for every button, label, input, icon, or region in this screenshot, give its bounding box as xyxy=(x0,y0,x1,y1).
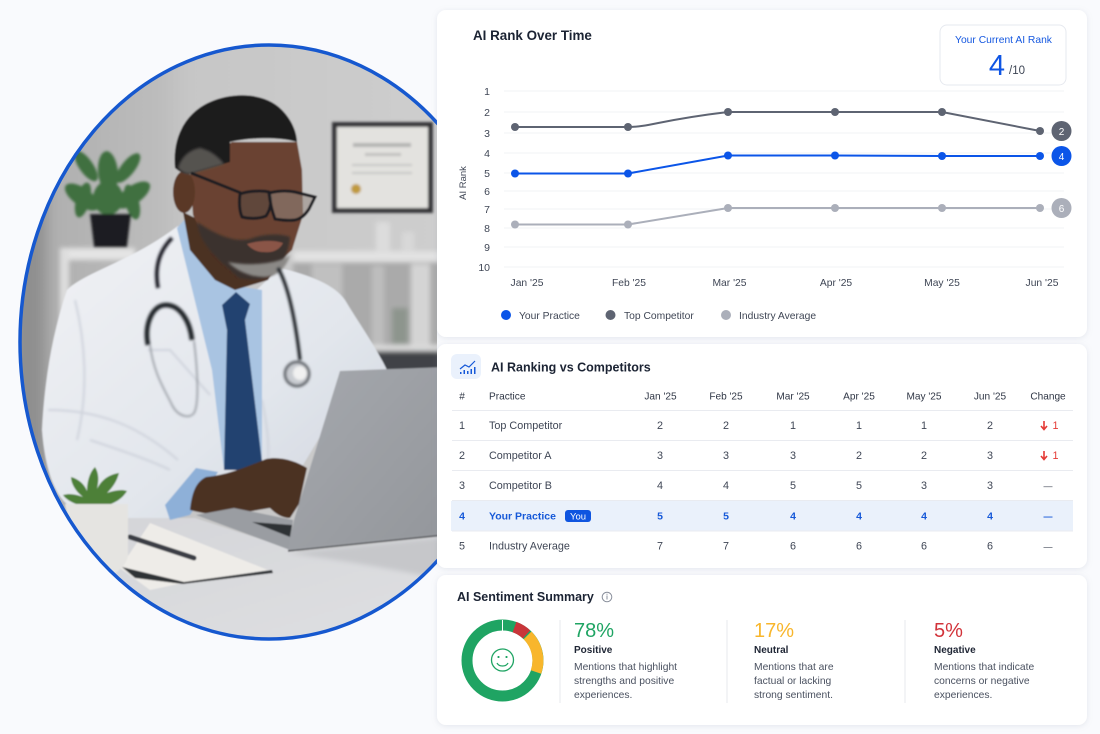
panel: AI Rank Over Time xyxy=(437,10,1087,337)
stat: neutral: factual or lacking xyxy=(754,676,832,687)
glasses xyxy=(191,173,315,220)
current rank card xyxy=(940,25,1066,85)
row: Top Competitor xyxy=(459,420,1059,432)
row: Competitor A: 2 xyxy=(856,450,862,462)
hand on keyboard xyxy=(190,458,307,518)
face xyxy=(189,140,304,257)
y axis labels: 4 xyxy=(484,148,490,160)
oval blue frame xyxy=(18,43,437,641)
row: Top Competitor: 2 xyxy=(987,420,993,432)
row: Competitor A: 2 xyxy=(921,450,927,462)
row: Top Competitor: 1 xyxy=(459,420,465,432)
row: Competitor B: Competitor B xyxy=(489,480,552,492)
beard xyxy=(197,222,290,279)
y axis labels: 5 xyxy=(484,168,490,180)
lab coat xyxy=(42,226,388,522)
change: down 1 xyxy=(1041,420,1059,432)
shirt cuff xyxy=(165,468,218,520)
line: industry average xyxy=(511,204,1044,228)
y axis labels: 7 xyxy=(484,204,490,216)
row: Competitor B: 5 xyxy=(790,480,796,492)
stat: positive: experiences. xyxy=(574,690,632,701)
icon: smile xyxy=(492,649,514,671)
table header: Change xyxy=(1030,392,1066,402)
end badges xyxy=(1052,121,1072,218)
donut chart xyxy=(467,620,538,696)
y axis title: AI Rank xyxy=(458,166,469,200)
row: Industry Average: 6 xyxy=(987,540,993,552)
row: Industry Average: 6 xyxy=(921,540,927,552)
row: Your Practice: 5 xyxy=(723,510,729,522)
y axis labels: 8 xyxy=(484,223,490,235)
x axis labels: Jan '25 xyxy=(511,278,544,289)
coat shading folds xyxy=(48,300,268,470)
table header: May '25 xyxy=(906,392,942,402)
end badges: 2 xyxy=(1059,127,1065,138)
row: Competitor B: 3 xyxy=(459,480,465,492)
x axis labels: Feb '25 xyxy=(612,278,646,289)
row: Your Practice: 4 xyxy=(987,510,993,522)
y axis labels: 3 xyxy=(484,128,490,140)
right shelf with binders xyxy=(293,222,443,373)
shirt collar xyxy=(177,218,262,470)
row: Competitor B: — xyxy=(1044,481,1052,491)
legend: Your Practice xyxy=(519,311,580,322)
y axis labels: 2 xyxy=(484,107,490,119)
line: your practice xyxy=(511,152,1044,178)
row: Your Practice: Your Practice xyxy=(489,510,556,522)
row: Your Practice xyxy=(459,510,1052,522)
end badges: 4 xyxy=(1059,152,1065,163)
small desk plant xyxy=(63,467,127,507)
potted plant on shelf xyxy=(60,147,155,247)
change: down 1: 1 xyxy=(1052,450,1059,462)
row: Competitor A: 3 xyxy=(790,450,796,462)
left white shelf xyxy=(58,246,136,316)
chart heading: AI Rank Over Time xyxy=(473,28,592,43)
necktie xyxy=(222,292,263,470)
neck xyxy=(183,212,280,290)
panel: AI Sentiment Summary xyxy=(437,575,1087,725)
stat: neutral: Neutral xyxy=(754,645,789,656)
legend: Industry Average xyxy=(739,311,816,322)
row: Competitor A: 3 xyxy=(657,450,663,462)
laptop screen back xyxy=(288,367,445,551)
row: Your Practice: You xyxy=(570,512,586,522)
stat: neutral: 17% xyxy=(754,620,794,642)
row: Industry Average: 7 xyxy=(657,540,663,552)
stat: positive: 78% xyxy=(574,620,614,642)
icon: info xyxy=(602,592,612,602)
stethoscope xyxy=(147,238,309,416)
row: Your Practice: 4 xyxy=(790,510,796,522)
stat: negative xyxy=(934,620,1034,701)
current rank card: Your Current AI Rank xyxy=(955,35,1053,46)
end badges: 6 xyxy=(1059,204,1065,215)
row: Competitor B: 4 xyxy=(657,480,663,492)
row: Your Practice: 4 xyxy=(459,510,465,522)
stat: negative: experiences. xyxy=(934,690,992,701)
stat: positive xyxy=(574,620,677,701)
row: Industry Average: 6 xyxy=(856,540,862,552)
change: down 1: 1 xyxy=(1052,420,1059,432)
row: Your Practice: 4 xyxy=(921,510,927,522)
row: Competitor B xyxy=(459,480,1052,492)
row: Competitor A: 2 xyxy=(459,450,465,462)
x axis labels xyxy=(511,278,1059,289)
row: Competitor A: Competitor A xyxy=(489,450,552,462)
x axis labels: Jun '25 xyxy=(1026,278,1059,289)
legend xyxy=(501,310,816,322)
row: Your Practice: 5 xyxy=(657,510,663,522)
row: Top Competitor: 2 xyxy=(723,420,729,432)
table header xyxy=(459,392,1066,402)
photo: doctor using a laptop in an oval frame xyxy=(18,43,437,641)
row: Industry Average: 5 xyxy=(459,540,465,552)
row: Your Practice: 4 xyxy=(856,510,862,522)
y axis labels: 1 xyxy=(484,86,490,98)
row: Industry Average: 6 xyxy=(790,540,796,552)
row: Top Competitor: 1 xyxy=(856,420,862,432)
table heading: AI Ranking vs Competitors xyxy=(491,360,651,374)
table header: Jun '25 xyxy=(974,392,1007,402)
laptop shadow on desk xyxy=(295,535,437,576)
highlighted row xyxy=(451,501,1073,531)
stat: positive: Mentions that highlight xyxy=(574,662,677,673)
notebook xyxy=(120,523,268,590)
y axis labels xyxy=(478,86,490,274)
row: Industry Average: 7 xyxy=(723,540,729,552)
table header: Practice xyxy=(489,392,526,402)
row: Industry Average: — xyxy=(1044,542,1052,552)
row: Competitor B: 4 xyxy=(723,480,729,492)
row: Competitor A: 3 xyxy=(987,450,993,462)
row: Competitor B: 3 xyxy=(987,480,993,492)
mouth xyxy=(247,241,283,252)
stat: neutral xyxy=(754,620,834,701)
row: Industry Average: Industry Average xyxy=(489,540,570,552)
x axis labels: Apr '25 xyxy=(820,278,852,289)
stat: negative: concerns or negative xyxy=(934,676,1030,687)
row: Top Competitor: 1 xyxy=(921,420,927,432)
row: Your Practice: — xyxy=(1044,512,1052,522)
left blurred cabinet xyxy=(22,205,51,478)
stat: positive: Positive xyxy=(574,645,613,656)
table header: Feb '25 xyxy=(709,392,743,402)
table header: Apr '25 xyxy=(843,392,875,402)
sentiment heading: AI Sentiment Summary xyxy=(457,590,594,604)
icon: trend chart xyxy=(451,354,481,379)
office background wall xyxy=(38,46,437,552)
desk surface xyxy=(115,518,420,638)
current rank card: 4 xyxy=(989,50,1005,82)
table header: # xyxy=(459,392,465,402)
row: Competitor A: 3 xyxy=(723,450,729,462)
table header: Jan '25 xyxy=(644,392,677,402)
row: Industry Average xyxy=(459,540,1052,552)
y axis labels: 6 xyxy=(484,186,490,198)
x axis labels: Mar '25 xyxy=(712,278,747,289)
row: Competitor B: 5 xyxy=(856,480,862,492)
ear xyxy=(173,171,195,213)
stat: negative: 5% xyxy=(934,620,963,642)
y axis labels: 10 xyxy=(478,262,490,274)
row: Top Competitor: Top Competitor xyxy=(489,420,563,432)
stat: negative: Negative xyxy=(934,645,976,656)
stat: neutral: strong sentiment. xyxy=(754,690,833,701)
change: down 1 xyxy=(1041,450,1059,462)
legend: Top Competitor xyxy=(624,311,694,322)
panel: AI Ranking vs Competitors xyxy=(437,344,1087,568)
row: Top Competitor: 2 xyxy=(657,420,663,432)
hair xyxy=(175,95,297,174)
row: Competitor B: 3 xyxy=(921,480,927,492)
current rank card: /10 xyxy=(1009,65,1025,77)
stat: neutral: Mentions that are xyxy=(754,662,834,673)
white pot xyxy=(65,504,128,576)
row: Competitor A xyxy=(459,450,1059,462)
table header: Mar '25 xyxy=(776,392,810,402)
pen xyxy=(130,537,194,558)
framed diploma xyxy=(332,122,433,213)
laptop base xyxy=(196,508,293,550)
x axis labels: May '25 xyxy=(924,278,960,289)
stat: negative: Mentions that indicate xyxy=(934,662,1034,673)
y axis labels: 9 xyxy=(484,242,490,254)
stat: positive: strengths and positive xyxy=(574,676,674,687)
row: Top Competitor: 1 xyxy=(790,420,796,432)
line: top competitor xyxy=(511,108,1044,135)
